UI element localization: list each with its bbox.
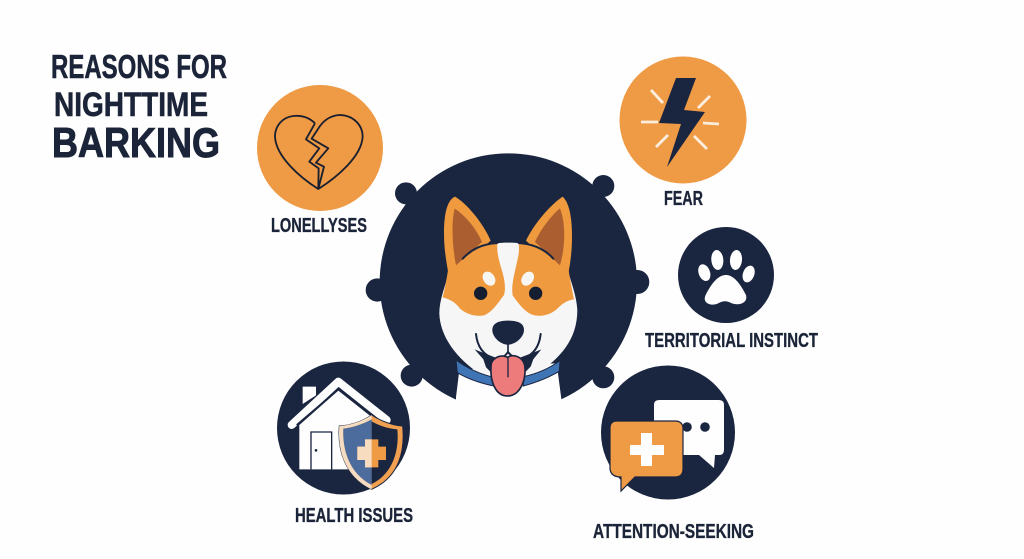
label: attention-seeking: ATTENTION-SEEKING — [593, 520, 754, 543]
tongue — [491, 356, 525, 396]
central dog illustration — [366, 153, 649, 420]
label: territorial instinct: TERRITORIAL INSTINCT — [645, 329, 818, 352]
orange face patches — [443, 243, 505, 316]
title: BARKING — [52, 119, 220, 166]
icon: orange speech bubble with plus — [610, 421, 683, 491]
brow line — [463, 243, 553, 259]
title: REASONS FOR — [51, 48, 227, 85]
lonely badge — [257, 85, 383, 211]
mouth — [475, 334, 541, 374]
territorial badge — [678, 227, 774, 323]
icon: white speech bubble — [654, 400, 724, 468]
attention badge — [601, 366, 735, 500]
eyes — [474, 287, 487, 300]
icon: shield with cross — [339, 415, 403, 489]
eye highlights — [480, 269, 498, 288]
label: lonelyses: LONELLYSES — [271, 214, 367, 237]
dog body — [456, 363, 561, 420]
title: NIGHTTIME — [54, 86, 208, 124]
title — [51, 48, 227, 166]
right ear — [526, 197, 572, 275]
health badge — [277, 362, 410, 494]
icon: house — [292, 382, 387, 469]
nose — [492, 321, 524, 345]
burst rays — [641, 90, 719, 149]
icon: broken heart — [275, 115, 363, 189]
blue collar — [456, 360, 560, 386]
fear badge — [620, 56, 746, 184]
label: health issues: HEALTH ISSUES — [295, 504, 413, 527]
label: fear: FEAR — [664, 187, 703, 210]
navy badge with nubs — [366, 153, 649, 411]
left ear — [444, 197, 491, 275]
face — [439, 243, 577, 374]
icon: lightning bolt — [659, 78, 705, 167]
icon: paw — [696, 249, 757, 305]
